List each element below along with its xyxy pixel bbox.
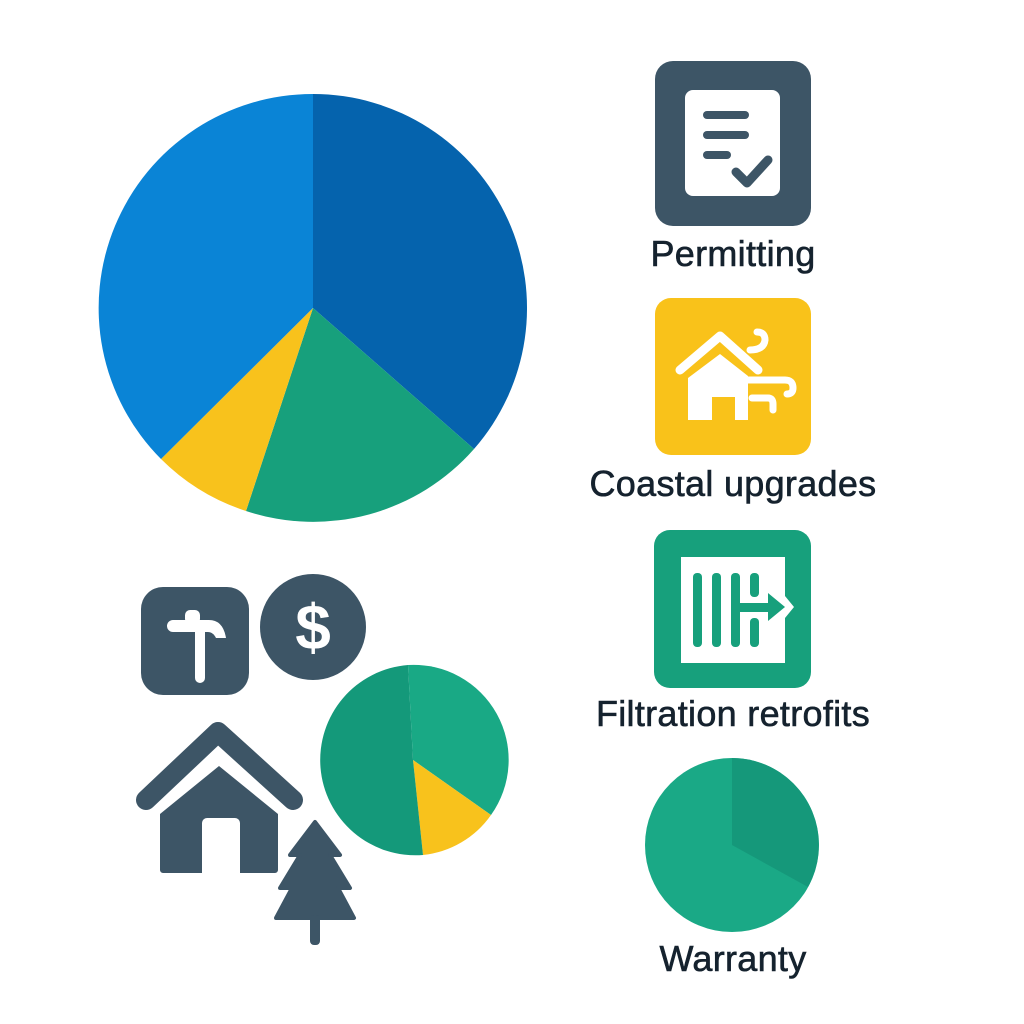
icon: tree — [276, 822, 354, 945]
icon: filtration retrofits — [654, 530, 811, 688]
icon: dollar coin: $ — [295, 591, 331, 663]
icon: hammer — [141, 587, 249, 695]
warranty pie chart — [645, 758, 819, 932]
main pie chart — [99, 94, 527, 522]
icon: coastal upgrades — [655, 298, 811, 455]
label: Warranty: Warranty — [659, 938, 807, 979]
icon: permitting document — [655, 61, 811, 226]
label: Coastal upgrades: Coastal upgrades — [590, 463, 876, 504]
icon: house — [146, 732, 293, 873]
label: Permitting: Permitting — [650, 233, 816, 274]
label: Filtration retrofits: Filtration retrofits — [596, 693, 870, 734]
small pie chart — [320, 665, 509, 855]
icon: dollar coin — [260, 574, 366, 680]
